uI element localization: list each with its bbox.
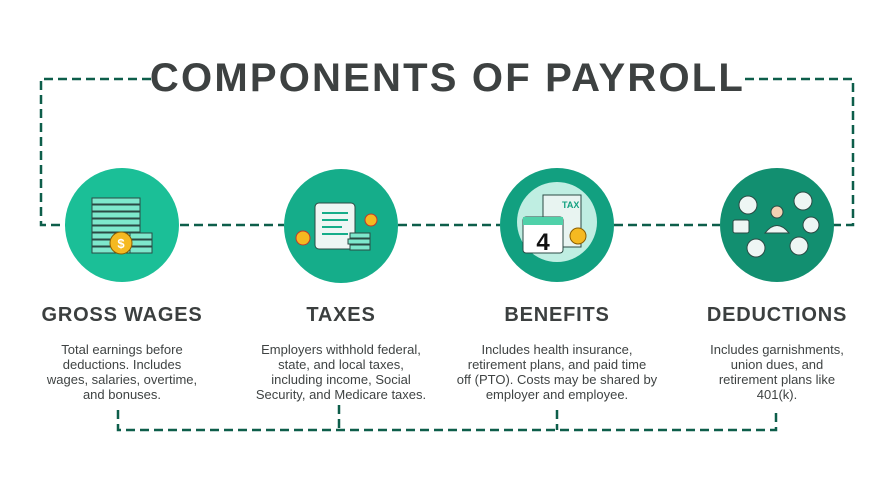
text: gross wages <box>46 342 197 402</box>
text: deductions: retirement plans like <box>719 372 835 387</box>
text: deductions: union dues, and <box>731 357 823 372</box>
text: taxes <box>256 342 426 402</box>
icon: gross wages: $ <box>117 236 125 251</box>
icon: gross wages <box>65 168 179 282</box>
text: benefits: off (PTO). Costs may be shared by <box>457 372 657 387</box>
title: COMPONENTS OF PAYROLL <box>150 56 745 100</box>
heading: benefits: BENEFITS <box>504 304 610 326</box>
heading: deductions: DEDUCTIONS <box>707 304 847 326</box>
heading: gross wages: GROSS WAGES <box>41 304 203 326</box>
icon: deductions <box>720 168 834 282</box>
text: taxes: Security, and Medicare taxes. <box>256 387 426 402</box>
text: taxes: Employers withhold federal, <box>261 342 421 357</box>
text: gross wages: wages, salaries, overtime, <box>47 372 197 387</box>
heading: taxes: TAXES <box>306 304 376 326</box>
text: benefits: employer and employee. <box>486 387 628 402</box>
icon: benefits: 4 <box>536 229 550 256</box>
text: benefits <box>457 342 658 402</box>
text: gross wages: deductions. Includes <box>63 357 181 372</box>
text: taxes: including income, Social <box>271 372 411 387</box>
text: deductions: 401(k). <box>757 387 797 402</box>
icon: taxes <box>284 169 398 283</box>
icon: benefits <box>500 168 614 282</box>
text: taxes: state, and local taxes, <box>278 357 404 372</box>
text: benefits: retirement plans, and paid time <box>468 357 646 372</box>
text: gross wages: and bonuses. <box>83 387 161 402</box>
icon: benefits: TAX <box>562 200 579 210</box>
text: benefits: Includes health insurance, <box>481 342 633 357</box>
text: gross wages: Total earnings before <box>61 342 183 357</box>
text: deductions: Includes garnishments, <box>710 342 844 357</box>
text: deductions <box>710 342 844 402</box>
